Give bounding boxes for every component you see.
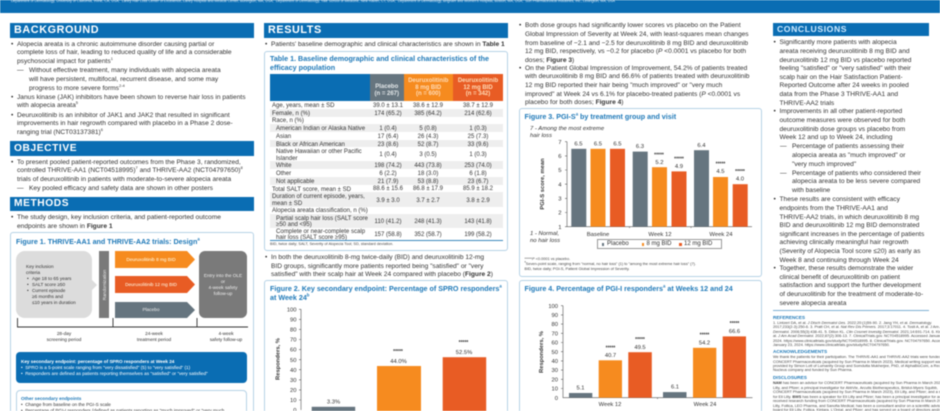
- chart: figure 2 bars: 30: [290, 378, 296, 384]
- flow diagram: inclusion criteria: [16, 251, 92, 318]
- conclusions text: THRIVE-AA2 trials: [780, 100, 834, 107]
- table 12 mg column: 3.8 ± 2.9: [466, 198, 490, 204]
- table 12 mg column: 33 (9.6): [468, 142, 488, 148]
- conclusions text: BID and deuruxolitinib 12 mg BID demonstrated: [780, 222, 919, 229]
- table 8 mg column: 3 (0.5): [419, 152, 437, 158]
- table row labels: Total SALT score, mean ± SD: [272, 186, 351, 192]
- heading: background: BACKGROUND: [14, 24, 99, 36]
- table 12 mg column: 143 (41.8): [464, 219, 492, 225]
- table placebo column: 17 (6.4): [378, 134, 398, 140]
- figure 3 footnote: a Seven-point scale, ranging from "normal, no hair loss" (1) to "among the most extreme hair loss" (7).: [524, 262, 696, 266]
- chart: figure 3 bars: 7: [558, 140, 562, 146]
- panel: figure 1 trial design: [10, 232, 254, 411]
- chart: figure 4 bars: 90: [552, 313, 558, 319]
- disclosures: [772, 375, 940, 411]
- table 12 mg column: 23 (6.7): [468, 178, 488, 184]
- table 12 mg column: 38.7 ± 12.9: [463, 103, 493, 109]
- heading: methods: [10, 197, 254, 211]
- conclusions text: of deuruxolitinib for the treatment of moderate-to-: [780, 291, 923, 298]
- timeline label: treatment: treatment period: [137, 336, 171, 342]
- table row labels: [272, 102, 368, 241]
- chart: figure 4 bars: 5.1: [576, 386, 585, 392]
- objective text: controlled THRIVE-AA1 (NCT04518995)7 and THRIVE-AA2 (NCT04797650)8: [17, 165, 243, 174]
- table 8 mg column: 3.7 ± 2.7: [416, 198, 440, 204]
- table shaded rows: [270, 109, 503, 228]
- results paragraph on SPRO: In both the deuruxolitinib 8-mg twice-daily (BID) and deuruxolitinib 12-mg: [271, 254, 484, 261]
- key secondary endpoint callout: Key secondary endpoint: percentage of SPRO responders at Week 24: [21, 359, 174, 364]
- chart: figure 4 bars: 70: [552, 331, 558, 337]
- chart: figure 4 bars: *****: [635, 337, 645, 343]
- conclusions text: significant increases in the percentage of patients: [780, 231, 924, 238]
- panel: table 1: [264, 50, 508, 250]
- table header: 12 mg BID: [463, 85, 493, 91]
- table header: [270, 74, 503, 100]
- figure 3 title: Figure 3. PGI-Sa by treatment group and visit: [524, 111, 676, 121]
- chart: figure 3 bars: Week 12: [648, 232, 672, 238]
- results intro text: Patients' baseline demographic and clinical characteristics are shown in Table 1: [271, 41, 505, 48]
- axis annotation: top: 7 - Among the most extreme: [530, 126, 604, 132]
- table 12 mg column: 85.9 ± 18.2: [463, 186, 493, 192]
- figure 2 title: Figure 2. Key secondary endpoint: Percentage of SPRO respondersa: [270, 284, 502, 293]
- objective text: [10, 158, 244, 192]
- chart: figure 3 bars: 5.2: [655, 160, 664, 166]
- chart: figure 4 bars: 54.2: [699, 340, 710, 346]
- chart: figure 4 bars: 20: [552, 377, 558, 383]
- table 8 mg column: [412, 102, 444, 238]
- chart: figure 2 bars: 90: [290, 318, 296, 324]
- table placebo column: 39.0 ± 13.1: [373, 103, 403, 109]
- table placebo column: [372, 102, 404, 238]
- table 8 mg column: 86.8 ± 17.9: [413, 186, 443, 192]
- conclusions text: scalp hair on the Hair Satisfaction Patient-: [780, 74, 903, 81]
- other secondary endpoints callout: [16, 390, 247, 411]
- panel: figure 4: [519, 280, 762, 411]
- conclusions text: alopecia areata to be less severe compared: [792, 178, 920, 185]
- results paragraph on SPRO: BID groups, significantly more patients reported being "satisfied" or "very: [271, 263, 483, 270]
- chart: figure 4 bars: Week 12: [599, 402, 621, 408]
- figure 2 title: at Week 24b: [270, 292, 309, 302]
- table 12 mg column: 1 (0.3): [469, 126, 487, 132]
- chart: figure 4 bars: 50: [552, 350, 558, 356]
- figure 3 footnote: *****P <0.0001 vs placebo.: [524, 257, 570, 261]
- inclusion criteria text: ≥6 months and: [32, 294, 63, 298]
- key secondary endpoint callout: • SPRO is a 5-point scale ranging from "very dissatisfied" (5) to "very satisfied" (1): [21, 365, 190, 370]
- conclusions text: Week 12 and up to Week 24, including: [780, 134, 892, 141]
- table footnote: BID, twice daily; SALT, Severity of Alopecia Tool; SD, standard deviation.: [270, 242, 393, 246]
- conclusions text: achieving clinically meaningful hair regrowth: [780, 239, 908, 246]
- references: REFERENCES: [773, 315, 805, 320]
- panel: figure 3: [519, 108, 762, 277]
- heading: results: RESULTS: [268, 24, 322, 36]
- chart: figure 4 bars: 0: [555, 396, 558, 402]
- table 12 mg column: 25 (7.3): [468, 134, 488, 140]
- table 1 title: Table 1. Baseline demographic and clinical characteristics of the: [270, 55, 489, 63]
- table placebo column: 1 (0.4): [379, 152, 397, 158]
- table 8 mg column: 38.6 ± 12.9: [413, 103, 443, 109]
- axis annotation: top: hair loss: [530, 133, 552, 139]
- heading: objective: OBJECTIVE: [14, 143, 77, 154]
- background text: Without effective treatment, many individuals with alopecia areata: [29, 67, 221, 74]
- chart: figure 4 bars: 100: [548, 304, 558, 310]
- figure 3 legend: 8 mg BID: [646, 241, 672, 247]
- chart: figure 4 bars: Responders, %: [539, 331, 545, 373]
- references: January 23, 2024. https://www.clinicaltrials.gov/study/NCT04797650.: [773, 343, 890, 347]
- randomization bar: [99, 251, 109, 318]
- background text: Deuruxolitinib is an inhibitor of JAK1 and JAK2 that resulted in significant: [17, 112, 230, 119]
- heading: background: [10, 23, 254, 38]
- conclusions text: data from the Phase 3 THRIVE-AA1 and: [780, 91, 898, 98]
- inclusion criteria text: SALT score ≥50: [32, 282, 65, 286]
- results paragraph on PGI-S: Global Impression of Severity at Week 24, with least-squares mean changes: [525, 31, 749, 38]
- results paragraph on PGI-S: doses; Figure 3): [525, 57, 574, 64]
- table row labels: Other: [276, 171, 291, 177]
- panel: figure 2: [264, 280, 508, 411]
- table row labels: Complete or near-complete scalp: [276, 229, 365, 235]
- chart: figure 2 bars: 70: [290, 338, 296, 344]
- table rule: [270, 239, 503, 242]
- figure 4 title: Figure 4. Percentage of PGI-I respondersa at Weeks 12 and 24: [524, 284, 733, 293]
- inclusion criteria text: [26, 264, 76, 306]
- table 12 mg column: [462, 102, 494, 238]
- heading: conclusions: CONCLUSIONS: [777, 24, 847, 34]
- chart: figure 3 bars: PGI-S score, mean: [540, 158, 546, 210]
- table 12 mg column: 253 (74.0): [464, 163, 492, 169]
- entry into OLE box: [199, 251, 247, 318]
- entry into OLE box: 4-week safety: [209, 285, 237, 290]
- header band with affiliations: [0, 0, 940, 12]
- chart: figure 2 bars: 44.0%: [390, 359, 407, 365]
- chart: figure 3 bars: 4.5: [716, 169, 725, 175]
- conclusions text: (Severity of Alopecia Tool score ≤20) as early as: [780, 248, 920, 255]
- table header: 8 mg BID: [415, 85, 441, 91]
- chart: figure 2 bars: Responders, %: [276, 338, 282, 380]
- conclusions text: Percentage of patients assessing their: [792, 143, 904, 150]
- table 1 title: [270, 54, 490, 72]
- chart: figure 3 bars: 6.3: [636, 144, 645, 150]
- table placebo column: 88.6 ± 15.6: [373, 186, 403, 192]
- table 8 mg column: 18 (3.0): [418, 171, 438, 177]
- chart: figure 4 bars: Week 24: [694, 402, 717, 408]
- conclusions text: "very much improved": [792, 161, 856, 168]
- table placebo column: 157 (58.8): [374, 232, 402, 238]
- timeline label: treatment: 24-week: [145, 330, 163, 336]
- table 1 title: efficacy population: [270, 64, 335, 72]
- chart: figure 2 bars: *****: [393, 349, 403, 355]
- methods text: [17, 214, 221, 232]
- acknowledgements: ACKNOWLEDGEMENTS: [773, 349, 827, 354]
- table placebo column: 110 (41.2): [375, 219, 401, 225]
- results paragraph on PGI-I: On the Patient Global Impression of Improvement, 54.2% of patients treated: [525, 65, 747, 72]
- entry into OLE box: follow-up: [214, 291, 232, 296]
- chart: figure 4 bars: *****: [606, 346, 615, 352]
- table 8 mg column: 385 (64.2): [414, 111, 442, 117]
- table 12 mg column: 214 (62.6): [464, 111, 492, 117]
- background text: Alopecia areata is a chronic autoimmune disorder causing partial or: [17, 41, 214, 48]
- background text: with alopecia areata5: [17, 100, 78, 109]
- objective text: trials of deuruxolitinib in patients with moderate-to-severe alopecia areata: [17, 176, 231, 183]
- table header: Placebo: [375, 84, 398, 90]
- timeline label: screening: 28-day: [57, 330, 71, 336]
- chart: figure 2 bars: *****: [459, 340, 468, 346]
- chart: figure 2 bars: 10: [290, 398, 296, 404]
- conclusions text: outcome measures were observed for both: [780, 117, 905, 124]
- table 8 mg column: 443 (73.8): [414, 163, 442, 169]
- background text: [10, 40, 246, 136]
- conclusions text: Percentage of patients who considered their: [792, 170, 921, 177]
- disclosures: DISCLOSURES: [773, 375, 807, 380]
- conclusions text: deuruxolitinib dose groups vs placebo from: [780, 126, 905, 133]
- table 8 mg column: 5 (0.8): [419, 126, 437, 132]
- table 8 mg column: 53 (8.8): [418, 178, 438, 184]
- table header: (n = 600): [416, 91, 440, 97]
- conclusions text: feeling "satisfied" or "very satisfied" with their: [780, 65, 911, 72]
- chart: figure 3 bars: 6.5: [574, 142, 583, 148]
- results paragraph on PGI-I: with deuruxolitinib 8 mg BID and 66.6% of patients treated with deuruxolitinib: [525, 73, 749, 80]
- table row labels: Duration of current episode, years,: [272, 194, 365, 200]
- table 8 mg column: 352 (58.7): [414, 232, 442, 238]
- heading: methods: METHODS: [14, 198, 69, 209]
- results paragraph on PGI-S: Both dose groups had significantly lower scores vs placebo on the Patient: [525, 22, 741, 29]
- conclusions text: Week 8 and continuing through Week 24: [780, 257, 899, 264]
- acknowledgements: CONCERT Pharmaceuticals (acquired by Sun Pharma in March 2023). Medical writing support was: [773, 360, 940, 364]
- chart: figure 4 bars: 40: [552, 359, 558, 365]
- background text: will have persistent, multifocal, recurrent disease, and some may: [29, 76, 218, 83]
- table 12 mg column: 1 (0.3): [469, 152, 487, 158]
- chart: figure 3 bars: 6: [558, 154, 562, 160]
- other secondary endpoints callout: • Change from baseline on the PGI-S scale: [21, 402, 111, 407]
- chart: figure 4 bars: 40.7: [605, 353, 616, 359]
- conclusions text: areata receiving deuruxolitinib 8 mg BID and: [780, 48, 910, 55]
- conclusions text: Together, these results demonstrate the wider: [780, 265, 913, 272]
- key secondary endpoint callout: [16, 352, 247, 383]
- arm label: 12 mg: Deuruxolitinib 12 mg BID: [125, 282, 177, 287]
- results paragraph on PGI-S: from baseline of −2.1 and −2.5 for deuruxolitinib 8 mg BID and deuruxolitinib: [525, 40, 748, 47]
- other secondary endpoints callout: Other secondary endpoints: [21, 396, 81, 401]
- chart: figure 2 bars: 52.5%: [456, 350, 472, 356]
- axis annotation: bottom: no hair loss: [530, 238, 560, 244]
- chart: figure 3 bars: 6.5: [613, 142, 622, 148]
- inclusion criteria text: Key inclusion: [26, 264, 54, 268]
- chart: figure 3 bars: *****: [735, 169, 745, 175]
- table placebo column: 21 (7.9): [378, 178, 398, 184]
- table header: (n = 267): [374, 91, 399, 97]
- results paragraph on PGI-I: improved" at Week 24 vs 6.1% for placebo-treated patients (P <0.0001 vs: [525, 91, 740, 98]
- references: 1. Lintzeri DA, et al. J Dtsch Dermatol Ges. 2022;20:(1)59-90. 2. Jang YH, et al. Dermatology.: [773, 321, 932, 325]
- conclusions text: Significantly more patients with alopecia: [780, 39, 897, 46]
- background text: progress to more severe forms2-4: [29, 82, 125, 92]
- entry into OLE box: Entry into the OLE: [204, 273, 242, 278]
- conclusions text: endpoints from the THRIVE-AA1 and: [780, 205, 888, 212]
- axis annotation: top: [530, 125, 605, 139]
- timeline label: follow-up: 4-week: [218, 330, 234, 336]
- axis annotation: bottom: 1 - Normal,: [530, 230, 559, 236]
- background text: psychosocial impact for patients1: [17, 56, 113, 65]
- figure 1 title: Figure 1. THRIVE-AA1 and THRIVE-AA2 trials: Designa: [16, 236, 200, 246]
- table row labels: Age, years, mean ± SD: [272, 103, 334, 109]
- table row labels: hair loss (SALT score ≥95): [276, 235, 347, 241]
- heading: results: [264, 23, 508, 38]
- table row labels: Native Hawaiian or other Pacific: [276, 149, 362, 155]
- chart: figure 3 bars: *****: [674, 156, 684, 162]
- table placebo column: 6 (2.2): [379, 171, 397, 177]
- background text: ranging trial (NCT03137381)6: [17, 127, 103, 136]
- results paragraph on SPRO: [271, 254, 493, 280]
- results paragraph on PGI-S: 12 mg BID, respectively, vs −0.2 for placebo (P <0.0001 vs placebo for both: [525, 48, 746, 55]
- table row labels: Female, n (%): [272, 111, 310, 117]
- results paragraph on PGI-I: [525, 65, 749, 108]
- inclusion criteria text: Current episode: [32, 288, 65, 292]
- table row labels: Alopecia areata classification, n (%): [272, 208, 368, 214]
- figure 3 legend: [597, 239, 722, 249]
- chart: figure 4 bars: 60: [552, 341, 558, 347]
- axis annotation: bottom: [530, 230, 560, 244]
- table 8 mg column: 52 (8.7): [418, 142, 438, 148]
- chart: figure 2 bars: 50: [290, 358, 296, 364]
- table row labels: American Indian or Alaska Native: [276, 126, 365, 132]
- objective text: To present pooled patient-reported outcomes from the Phase 3, randomized,: [17, 159, 241, 166]
- inclusion criteria text: Age 18 to 65 years: [32, 276, 71, 280]
- conclusions text: clinical benefit of deuruxolitinib on patient: [780, 274, 900, 281]
- table header: Deuruxolitinib: [458, 78, 498, 84]
- chart: figure 2 bars: 80: [290, 328, 296, 334]
- arm label: placebo: Placebo: [143, 307, 159, 312]
- entry into OLE box: or: [221, 279, 225, 284]
- table row labels: White: [276, 163, 291, 169]
- chart: figure 3 bars: 1: [558, 225, 562, 231]
- objective text: Key pooled efficacy and safety data are shown in other posters: [29, 185, 213, 192]
- table row labels: Not applicable: [276, 179, 314, 185]
- table placebo column: 198 (74.2): [374, 163, 402, 169]
- chart: figure 3 bars: Week 24: [709, 232, 733, 238]
- figure 3 legend: 12 mg BID: [684, 241, 712, 247]
- chart: figure 3 bars: *****: [716, 162, 725, 168]
- results paragraph on SPRO: satisfied" with their scalp hair at Week 24 compared with placebo (Figure 2): [271, 271, 493, 278]
- conclusions text: THRIVE-AA2 trials, in which deuruxolitinib 8 mg: [780, 214, 919, 221]
- inclusion criteria text: •: [27, 282, 29, 286]
- background text: complete loss of hair, leading to reduced quality of life and a considerable: [17, 49, 232, 56]
- heading: conclusions: [773, 23, 929, 36]
- references: [772, 315, 940, 348]
- conclusions text: deuruxolitinib 12 mg BID vs placebo reported: [780, 57, 911, 64]
- inclusion criteria text: •: [27, 276, 29, 280]
- conclusions text: with baseline: [792, 187, 830, 194]
- figure 3 footnote: BID, twice daily; PGI-S, Patient Global Impression of Severity.: [524, 267, 630, 271]
- table placebo column: 3.9 ± 3.0: [376, 198, 400, 204]
- divider rule: [773, 310, 929, 311]
- background text: Janus kinase (JAK) inhibitors have been shown to reverse hair loss in patients: [17, 94, 246, 101]
- table 8 mg column: 26 (4.3): [418, 134, 438, 140]
- table placebo column: 174 (65.2): [374, 111, 402, 117]
- inclusion criteria text: ≤10 years in duration: [32, 300, 76, 304]
- chart: figure 3 bars: 2: [558, 211, 562, 217]
- inclusion criteria text: criteria: [26, 270, 40, 274]
- chart: figure 3 bars: 4: [558, 182, 562, 188]
- figure 2 title: [270, 284, 502, 302]
- table placebo column: 23 (8.6): [378, 142, 398, 148]
- chart: figure 2 bars: 60: [290, 348, 296, 354]
- conclusions text: alopecia areata as "much improved" or: [792, 152, 905, 159]
- results paragraph on PGI-I: placebo for both doses; Figure 4): [525, 99, 623, 106]
- conclusions text: [773, 38, 925, 307]
- chart: figure 3 bars: 6.4: [697, 143, 706, 149]
- conclusions text: severe alopecia areata: [780, 300, 846, 307]
- key secondary endpoint callout: • Responders are defined as patients reporting themselves as "satisfied" or "very satisfied": [21, 371, 208, 376]
- table row labels: Black or African American: [276, 142, 345, 148]
- acknowledgements: provided by Simon Lott of Lumanity Group and Somdutta Mukherjee, PhD, of AlphaBioCom, a Red: [773, 364, 940, 368]
- figure 3 footnote: [524, 256, 696, 272]
- methods text: endpoints are shown in Figure 1: [17, 223, 113, 230]
- chart: figure 3 bars: *****: [654, 152, 664, 158]
- timeline label: follow-up: safety follow-up: [210, 336, 242, 342]
- conclusions text: satisfaction and support the further development: [780, 282, 921, 289]
- chart: figure 2 bars: 20: [290, 388, 296, 394]
- table 12 mg column: 6 (1.8): [469, 171, 487, 177]
- table header: (n = 342): [466, 91, 490, 97]
- randomization label: Randomization: [102, 270, 106, 300]
- table header: Deuruxolitinib: [408, 78, 448, 84]
- table row labels: mean ± SD: [272, 201, 302, 207]
- acknowledgements: [772, 349, 940, 372]
- chart: figure 4 bars: 10: [552, 387, 558, 393]
- timeline label: screening: [46, 330, 82, 342]
- figure 3 legend: Placebo: [607, 241, 629, 247]
- chart: figure 4 bars: 80: [552, 322, 558, 328]
- chart: figure 4 bars: *****: [700, 332, 709, 338]
- timeline label: treatment: [136, 330, 172, 342]
- disclosures: Lilly, and Pfizer; a principal investigator for AbbVie, Arcutis Biotherapeutics, Bristol-Myers Squibb,: [773, 386, 938, 390]
- table row labels: Islander: [276, 156, 298, 162]
- background text: improvements in hair regrowth compared with placebo in a Phase 2 dose-: [17, 120, 233, 127]
- chart: figure 3 bars: 6.5: [594, 142, 603, 148]
- chart: figure 4 bars: 49.5: [634, 345, 646, 351]
- table 12 mg column: 199 (58.2): [464, 232, 492, 238]
- chart: figure 2 bars: 40: [290, 368, 296, 374]
- acknowledgements: Nucleus company and funded by Sun Pharma.: [773, 368, 852, 372]
- chart: figure 2 bars: 3.3%: [327, 400, 340, 406]
- timeline label: follow-up: [209, 330, 243, 342]
- chart: figure 4 bars: 6.1: [671, 385, 679, 391]
- inclusion criteria text: •: [27, 288, 29, 292]
- methods text: The study design, key inclusion criteria, and patient-reported outcome: [17, 214, 221, 221]
- results paragraph on PGI-S: [525, 22, 749, 65]
- table row labels: ≥50 and <95): [276, 222, 312, 228]
- chart: figure 3 bars: 4.0: [736, 176, 745, 182]
- arm label: 8 mg: Deuruxolitinib 8 mg BID: [126, 257, 176, 262]
- conclusions text: Improvements in all other patient-reported: [780, 108, 902, 115]
- table 8 mg column: 248 (41.3): [414, 219, 442, 225]
- table row labels: Asian: [276, 134, 291, 140]
- table row labels: Partial scalp hair loss (SALT score: [276, 216, 368, 222]
- table row labels: Race, n (%): [272, 118, 304, 124]
- chart: figure 3 bars: 3: [558, 196, 562, 202]
- conclusions text: These results are consistent with efficacy: [780, 196, 900, 203]
- timeline label: screening: screening period: [47, 336, 81, 342]
- chart: figure 3 bars: 5: [558, 168, 562, 174]
- chart: figure 4 bars: 66.6: [729, 329, 740, 335]
- chart: figure 3 bars: 4.9: [675, 164, 683, 170]
- chart: figure 4 bars: 30: [552, 368, 558, 374]
- heading: objective: [10, 141, 254, 156]
- chart: figure 4 bars: *****: [730, 321, 739, 327]
- chart: figure 2 bars: 100: [287, 308, 296, 314]
- table placebo column: 1 (0.4): [379, 126, 397, 132]
- results paragraph on PGI-I: 12 mg BID reported their hair being "much improved" or "very much: [525, 82, 722, 89]
- conclusions text: Reported Outcome after 24 weeks in pooled: [780, 82, 909, 89]
- chart: figure 3 bars: Baseline: [587, 232, 610, 238]
